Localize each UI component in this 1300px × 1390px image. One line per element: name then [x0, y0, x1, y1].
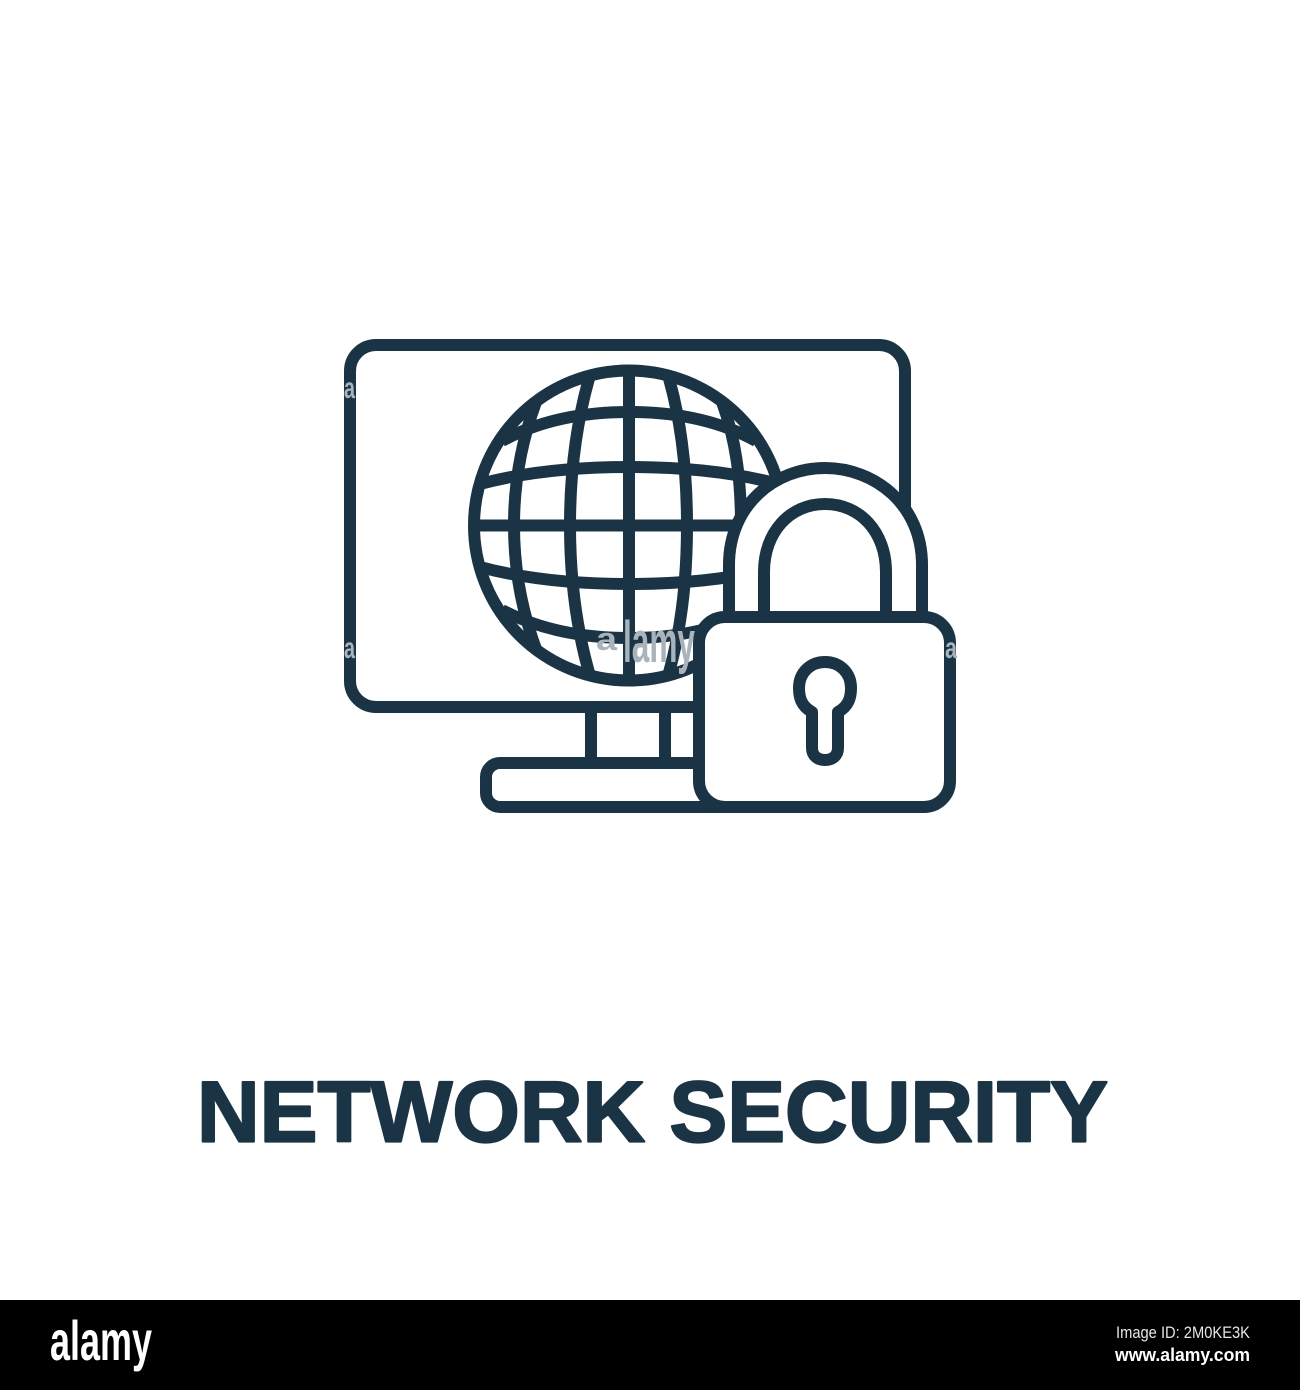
- watermark: a: [344, 632, 355, 665]
- footer logo: alamy: [50, 1309, 152, 1372]
- watermark: [344, 372, 957, 675]
- image id: Image ID: 2M0KE3K: [1116, 1323, 1251, 1342]
- icon: monitor stand: [486, 707, 786, 807]
- icon: network security: [350, 345, 950, 807]
- footer bar: [0, 1300, 1300, 1390]
- icon: keyhole: [799, 662, 851, 760]
- watermark: a: [344, 372, 355, 405]
- website: www.alamy.com: [1114, 1345, 1250, 1365]
- watermark: a: [596, 621, 617, 657]
- watermark: a: [945, 632, 957, 665]
- title: NETWORK SECURITY: [197, 1064, 1108, 1160]
- icon: padlock shackle: [729, 468, 922, 625]
- icon: globe: [474, 370, 784, 680]
- watermark: lamy: [623, 610, 695, 675]
- icon: padlock body: [699, 617, 950, 807]
- icon: monitor screen: [350, 345, 905, 707]
